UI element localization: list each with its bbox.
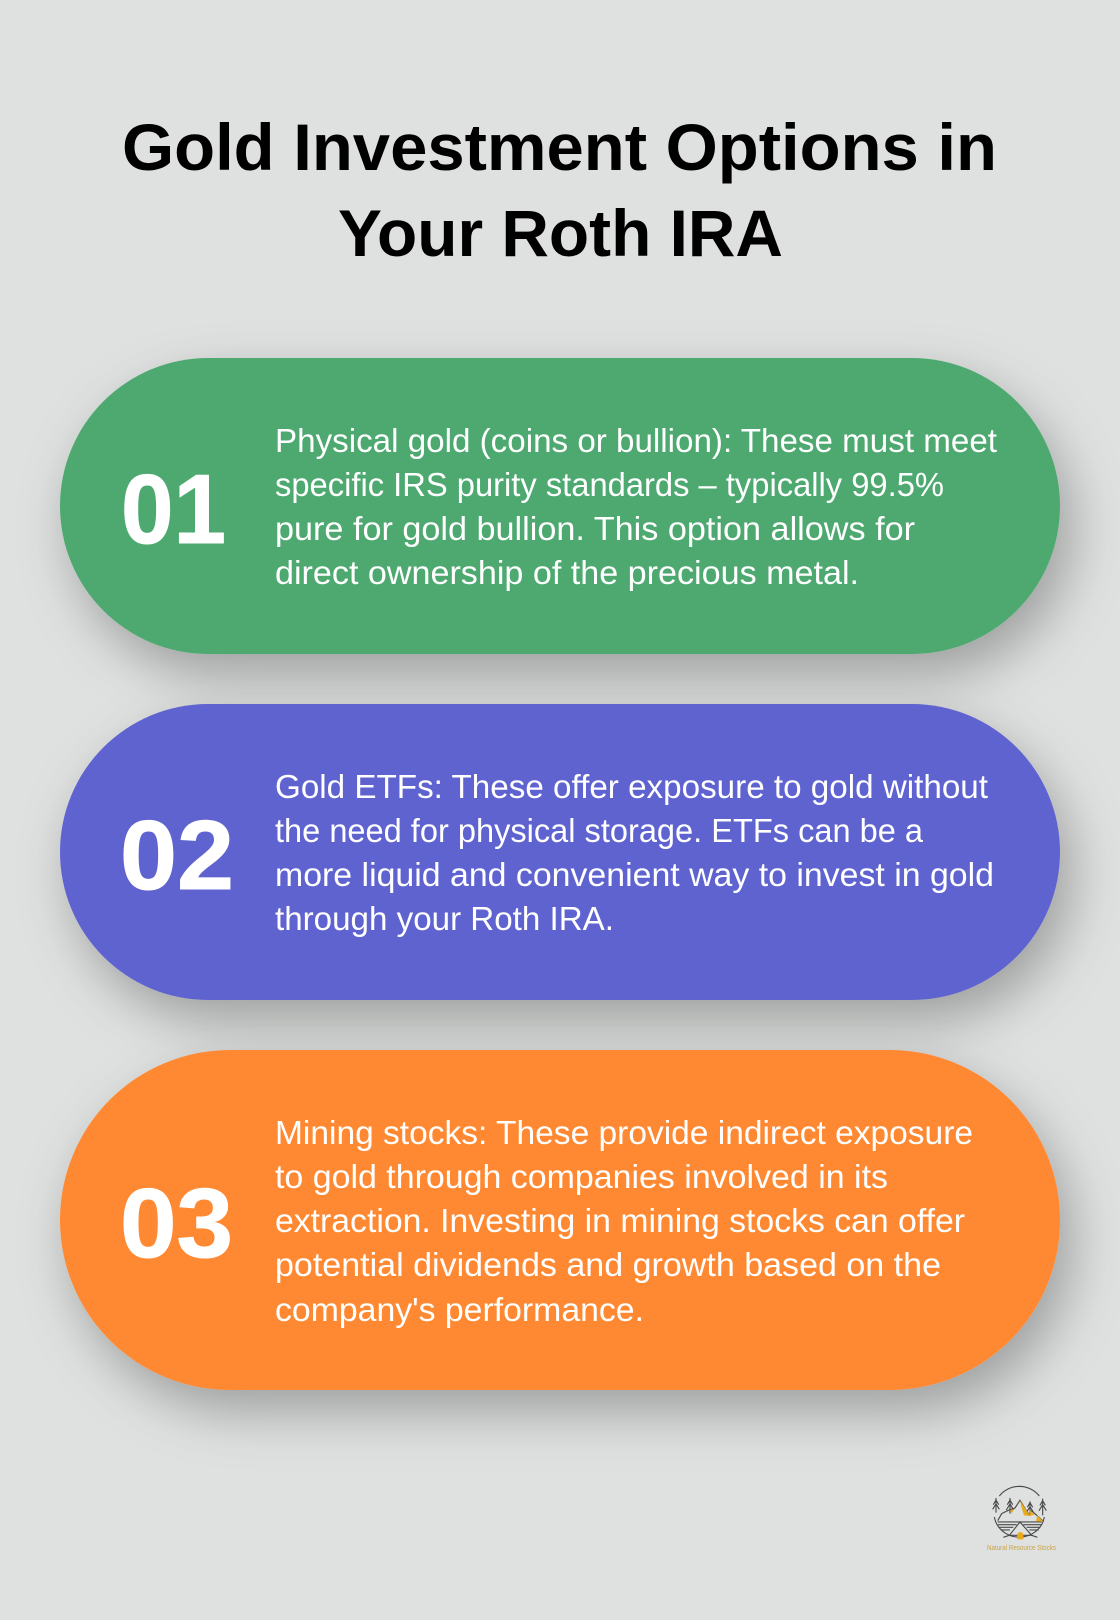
- text: ETF description: the need for physical storage. ETFs can be a: [275, 812, 924, 849]
- logo emblem: [993, 1486, 1046, 1537]
- orange pill background: [60, 1050, 1060, 1390]
- green pill background: [60, 358, 1060, 654]
- title: [122, 110, 997, 270]
- text: mining stocks description: to gold through companies involved in its: [275, 1158, 888, 1195]
- text: mining stocks description: [275, 1114, 973, 1328]
- text: ETF description: Gold ETFs: These offer exposure to gold without: [275, 768, 988, 805]
- panel: physical gold: [60, 358, 1060, 654]
- logo caption: Natural Resource Stocks: [987, 1545, 1056, 1552]
- text: mining stocks description: extraction. Investing in mining stocks can offer: [275, 1202, 965, 1239]
- text: physical gold description: specific IRS purity standards – typically 99.5%: [275, 466, 944, 503]
- number 01: 01: [121, 454, 226, 564]
- text: physical gold description: pure for gold bullion. This option allows for: [275, 510, 915, 547]
- logo: Natural Resource Stocks: [987, 1486, 1056, 1552]
- text: physical gold description: direct ownership of the precious metal.: [275, 554, 859, 591]
- text: mining stocks description: Mining stocks: These provide indirect exposure: [275, 1114, 973, 1151]
- number 02: 02: [120, 800, 234, 910]
- purple pill background: [60, 704, 1060, 1000]
- text: ETF description: more liquid and convenient way to invest in gold: [275, 856, 994, 893]
- text: ETF description: through your Roth IRA.: [275, 900, 614, 937]
- text: physical gold description: [275, 422, 997, 591]
- number 03: 03: [120, 1168, 233, 1278]
- text: mining stocks description: company's performance.: [275, 1291, 644, 1328]
- text: ETF description: [275, 768, 994, 937]
- panel: gold ETFs: [60, 704, 1060, 1000]
- text: physical gold description: Physical gold (coins or bullion): These must meet: [275, 422, 997, 459]
- panel: mining stocks: [60, 1050, 1060, 1390]
- text: mining stocks description: potential dividends and growth based on the: [275, 1246, 941, 1283]
- title: Your Roth IRA: [338, 196, 783, 270]
- title: Gold Investment Options in: [122, 110, 997, 184]
